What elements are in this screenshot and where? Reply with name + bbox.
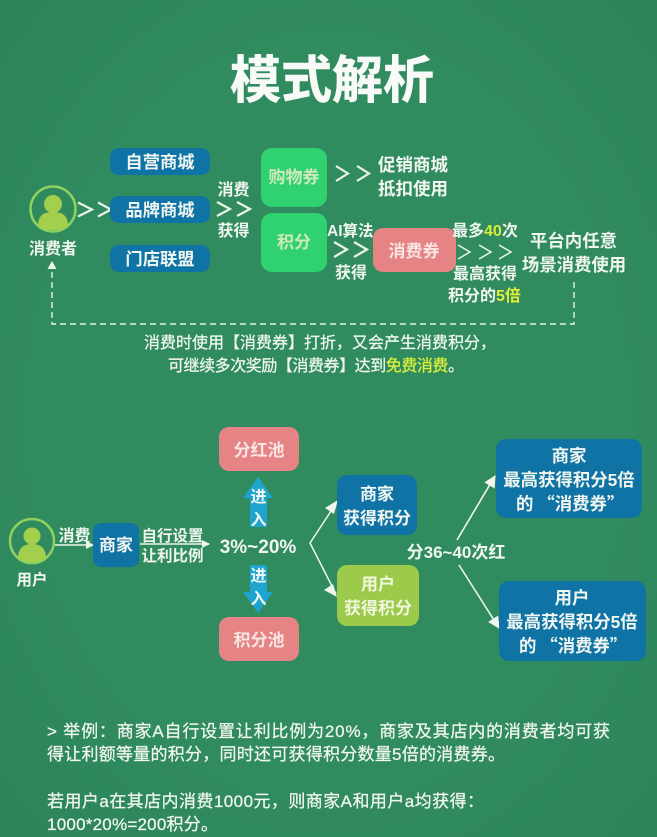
label: user: 用户 — [16, 570, 48, 589]
text block: example: 若用户a在其店内消费1000元，则商家A和用户a均获得： — [47, 792, 484, 811]
text: promo mall deduction: 促销商城 — [378, 155, 448, 175]
icon: consumer — [30, 186, 76, 232]
box: consumption voucher — [373, 228, 456, 272]
store: self-run mall — [110, 148, 210, 175]
text: use anywhere on platform: 平台内任意 — [530, 231, 617, 251]
box: dividend pool — [219, 427, 299, 471]
label: AI algorithm obtain: AI算法 — [327, 221, 374, 240]
box: points — [261, 213, 327, 272]
text block: example: 得让利额等量的积分，同时还可获得积分数量5倍的消费券。 — [47, 745, 505, 764]
box: points pool: 积分池 — [234, 631, 284, 650]
icon: user — [10, 519, 54, 563]
box: merchant gets points: 获得积分 — [343, 509, 411, 528]
box: user reward: 用户 — [555, 588, 589, 608]
label: AI algorithm obtain — [327, 221, 374, 282]
arrow: enter down — [243, 565, 273, 613]
text: loop note — [144, 334, 496, 375]
text block: example: > 举例：商家A自行设置让利比例为20%，商家及其店内的消费者均可获 — [47, 722, 610, 741]
label: set ratio: 让利比例 — [141, 547, 204, 565]
text: promo mall deduction: 抵扣使用 — [378, 179, 448, 199]
box: user gets points: 获得积分 — [344, 599, 412, 618]
arrow: enter up: 入 — [250, 511, 267, 529]
text: up to 5 times points: 最高获得 — [453, 264, 517, 283]
arrow: merchant to ratio — [140, 543, 209, 545]
box: merchant gets points: 商家 — [360, 484, 394, 504]
text block: example: 1000*20%=200积分。 — [47, 815, 218, 834]
text: use anywhere on platform — [522, 231, 626, 275]
text: up to 5 times points: 积分的5倍 — [448, 286, 521, 305]
text: loop note: 消费时使用【消费券】打折，又会产生消费积分， — [144, 334, 496, 352]
label: consume and obtain: 消费 — [217, 181, 250, 199]
store: store alliance: 门店联盟 — [125, 249, 195, 269]
text: dividend times: 分36~40次红 — [407, 543, 505, 562]
store: self-run mall: 自营商城 — [125, 152, 195, 172]
label: set ratio — [141, 527, 204, 565]
box: dividend pool: 分红池 — [234, 441, 284, 460]
arrows: triple — [458, 245, 511, 259]
arrow: dashed loop back — [48, 261, 574, 324]
store: brand mall: 品牌商城 — [125, 200, 195, 220]
label: consume and obtain: 获得 — [217, 222, 250, 240]
label: consume and obtain — [217, 181, 250, 240]
store: store alliance — [110, 245, 210, 272]
arrows: voucher to promo — [336, 166, 369, 181]
box: merchant — [93, 523, 139, 567]
box: merchant reward — [496, 439, 642, 518]
box: points: 积分 — [277, 233, 311, 252]
arrow: user to merchant — [55, 544, 93, 546]
box: merchant reward: 的 “消费券” — [516, 491, 624, 516]
box: merchant gets points — [337, 475, 417, 535]
title: 模式解析 — [230, 52, 434, 109]
label: consume: 消费 — [58, 527, 91, 545]
box: consumption voucher: 消费券 — [388, 241, 440, 261]
panel: consumer flow — [29, 148, 626, 375]
arrow: enter up: 进 — [250, 488, 267, 506]
arrow: to merchant reward — [457, 476, 495, 540]
text: up to 5 times points — [448, 264, 521, 305]
box: user gets points — [337, 565, 419, 626]
box: shopping voucher — [261, 148, 327, 207]
box: merchant: 商家 — [99, 535, 133, 555]
arrow: enter down: 入 — [250, 590, 267, 608]
box: user gets points: 用户 — [361, 574, 395, 594]
box: user reward: 的 “消费券” — [519, 633, 627, 658]
text: promo mall deduction — [378, 155, 448, 199]
label: set ratio: 自行设置 — [141, 527, 204, 545]
box: user reward: 最高获得积分5倍 — [506, 612, 638, 632]
panel: merchant flow — [10, 427, 646, 661]
arrows: consumer to stores — [78, 202, 111, 216]
box: merchant reward: 商家 — [552, 446, 587, 466]
box: points pool — [219, 617, 299, 661]
arrow: to user reward — [459, 565, 499, 628]
text: loop note: 可继续多次奖励【消费券】达到免费消费。 — [168, 357, 464, 375]
box: merchant reward: 最高获得积分5倍 — [503, 470, 635, 490]
label: consumer: 消费者 — [29, 240, 77, 258]
text: up to 40 times: 最多40次 — [452, 221, 518, 240]
text block: example — [47, 722, 610, 834]
box: user reward — [499, 581, 646, 661]
label: AI algorithm obtain: 获得 — [335, 264, 367, 282]
text: ratio: 3%~20% — [220, 537, 296, 558]
arrow: enter up — [243, 477, 273, 529]
store: brand mall — [110, 196, 210, 223]
arrows: ratio fork — [310, 500, 338, 597]
arrow: enter down: 进 — [250, 567, 267, 585]
text: use anywhere on platform: 场景消费使用 — [522, 255, 626, 275]
box: shopping voucher: 购物券 — [268, 167, 320, 187]
